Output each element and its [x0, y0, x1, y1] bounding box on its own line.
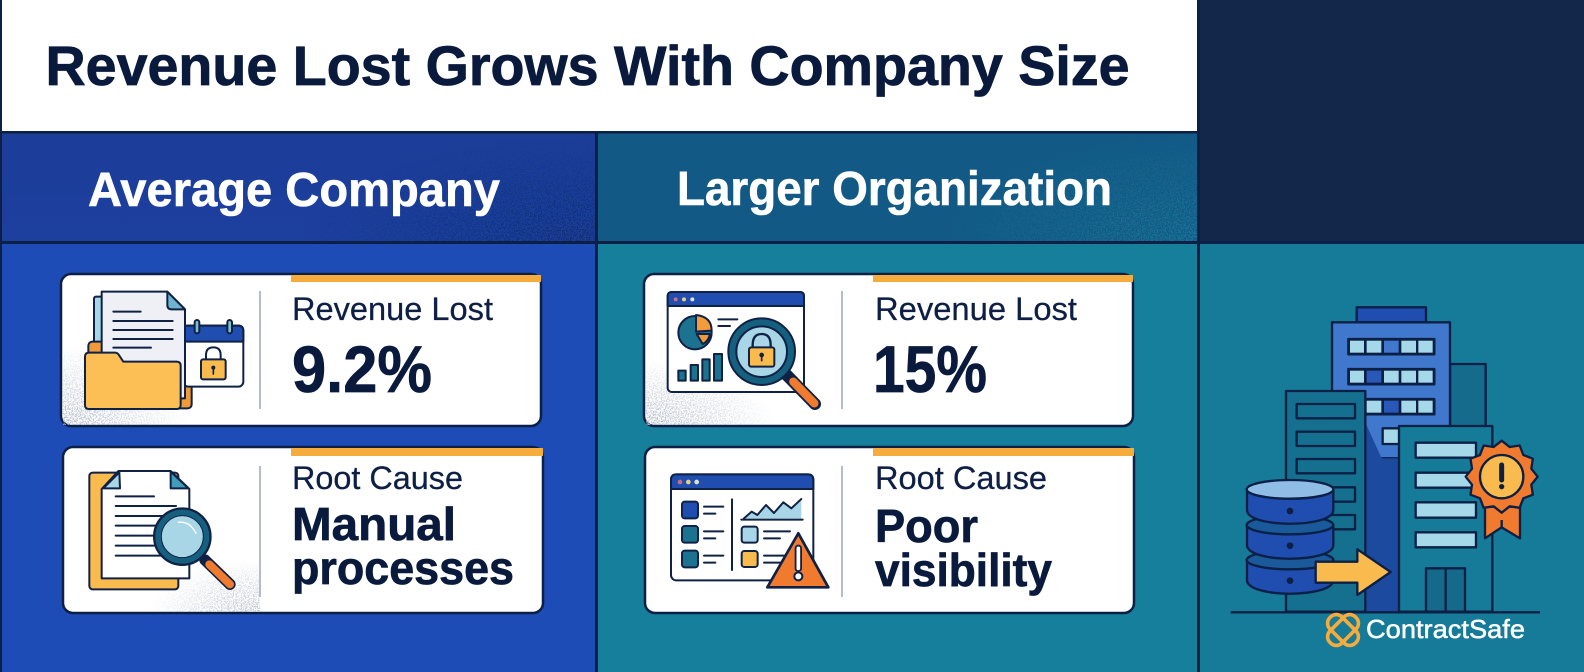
illustration: buildings, database, arrow and badge: [1231, 307, 1540, 612]
column header: larger organization: [598, 133, 1198, 242]
icon: dashboard with warning triangle: [671, 474, 828, 587]
panel: average company: [2, 244, 596, 672]
column header: larger organization: Larger Organization: [677, 163, 1112, 216]
card: revenue lost 9.2%: Revenue Lost: [292, 291, 493, 327]
card: revenue lost 15%: 15%: [873, 332, 987, 406]
card: root cause manual processes: Manual: [292, 498, 456, 550]
card: root cause poor visibility: visibility: [875, 544, 1052, 596]
column header: average company: Average Company: [88, 164, 500, 217]
icon: dashboard with lock magnifier: [668, 292, 815, 404]
card: root cause manual processes: processes: [292, 542, 514, 594]
card: revenue lost 9.2%: [61, 274, 541, 426]
card: root cause manual processes: Root Cause: [292, 460, 463, 496]
arrow: data into building: [1316, 549, 1391, 595]
card: revenue lost 15%: [644, 274, 1133, 426]
icon: database: [1247, 480, 1333, 594]
card: revenue lost 15%: Revenue Lost: [875, 291, 1077, 327]
card: revenue lost 9.2%: 9.2%: [292, 332, 432, 406]
card: root cause poor visibility: [645, 447, 1134, 613]
logo: ContractSafe: [1324, 611, 1525, 649]
icon: folder with document and calendar lock: [85, 292, 243, 409]
icon: warning badge: [1466, 441, 1538, 538]
column header: average company: [2, 133, 596, 242]
panel: right illustration: [1200, 244, 1584, 672]
title banner: [2, 0, 1198, 131]
logo: ContractSafe: ContractSafe: [1366, 614, 1525, 644]
icon: document with magnifier: [89, 471, 230, 589]
title banner: Revenue Lost Grows With Company Size: [46, 34, 1130, 97]
card: root cause poor visibility: Root Cause: [875, 460, 1047, 496]
panel: larger organization: [598, 244, 1198, 672]
card: root cause manual processes: [63, 447, 543, 613]
card: root cause poor visibility: Poor: [875, 500, 978, 552]
